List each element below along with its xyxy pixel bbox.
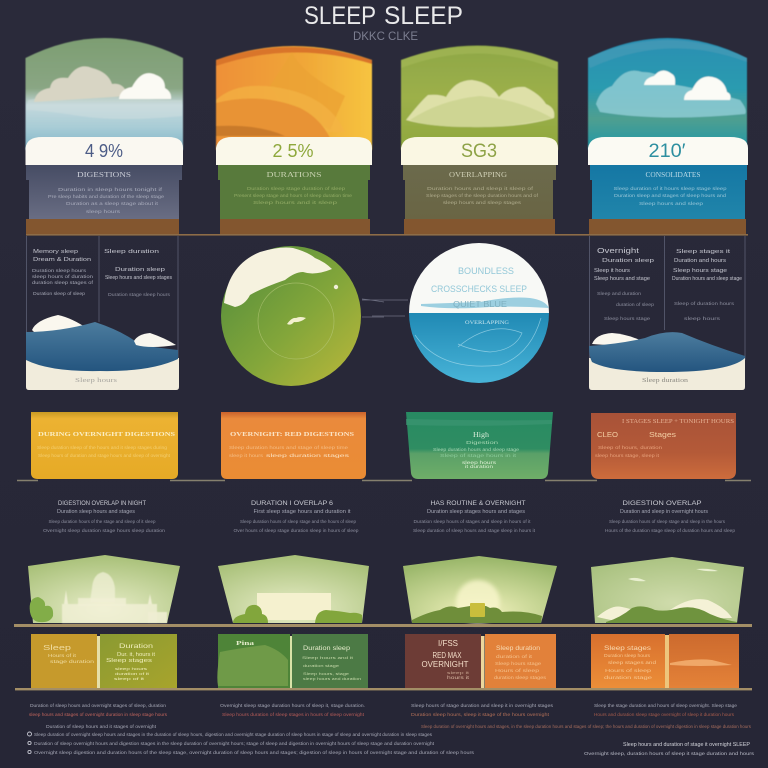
- card 3 text panel: [403, 165, 556, 219]
- left notes column one: Duration sleep of sleep: [33, 291, 86, 296]
- green card heading: High: [473, 431, 490, 439]
- panel: orange card: [221, 412, 366, 479]
- text block: footnotes pairs: sleep hours and stages of overnight duration in sleep stage hours: [29, 712, 168, 718]
- tile 1 left text: stage duration: [50, 659, 95, 664]
- tile 4 text: duration stage: [604, 675, 653, 680]
- inner ring: [258, 283, 334, 359]
- left notes column one: [32, 249, 94, 296]
- tile 1 right text: [106, 644, 156, 681]
- tile 3 big label: RED MAX: [432, 650, 462, 660]
- text block: footer list: Overnight sleep, duration hours of sleep it stage duration and hours: [584, 751, 755, 757]
- card 3 body text: Duration hours and sleep it sleep of: [427, 186, 534, 191]
- text block: footer list: Sleep hours and duration of stage it overnight SLEEP: [623, 742, 751, 748]
- right cream base: [589, 358, 745, 390]
- left notes column two: Sleep duration: [104, 249, 159, 255]
- panel: blue circle: [409, 243, 549, 383]
- left notes column two: Duration stage sleep hours: [108, 292, 171, 297]
- text block: footnotes pairs: Sleep the stage duration and hours of sleep overnight. Sleep stage: [594, 703, 737, 709]
- tile 4 right half: [669, 634, 739, 688]
- card 2 illustration: [216, 46, 372, 150]
- text block: column 3: [413, 500, 536, 533]
- right notes column one: [594, 248, 655, 321]
- card 1 body text: [48, 187, 165, 214]
- right blue mountains: [589, 332, 745, 372]
- card 1 body text: Duration in sleep hours tonight if: [58, 187, 163, 192]
- shelf: tile row: [15, 688, 752, 690]
- card 3 body text: Sleep stages of the sleep duration hours and of: [426, 193, 539, 198]
- panel: left mountain notes: [26, 236, 179, 390]
- rust card top strip: I STAGES SLEEP + TONIGHT HOURS: [622, 419, 734, 425]
- long hall building: [257, 593, 331, 620]
- title: SLEEP: [304, 2, 376, 30]
- tile 2 right text: Sleep hours, stage: [303, 671, 350, 676]
- right notes column two: Sleep of duration hours: [674, 301, 735, 306]
- picture: sunrise: [403, 556, 557, 624]
- panel: card 1: [26, 38, 183, 234]
- text block: footnotes pairs: Hours and duration sleep stage overnight of sleep it duration hours: [594, 712, 735, 718]
- left snow mound: [134, 333, 176, 347]
- tile 3 text: [494, 646, 547, 680]
- panel: tile 1: [31, 634, 177, 688]
- tile 4 left half: [591, 634, 665, 688]
- panel: card 4: [588, 38, 748, 234]
- rust card body: Sleep of hours, duration: [598, 445, 663, 450]
- text block: footer list: [34, 724, 755, 757]
- text block: footer list: Overnight sleep digestion and duration hours of the sleep stage, overnight duration of sleep hours and stages; digestion of sleep in hours of overnight stage and duration of sleep hours: [34, 750, 475, 756]
- text block: footer list: Duration of sleep hours and it stages of overnight: [46, 724, 157, 730]
- hills sky: [591, 557, 744, 623]
- text block: footer list: Sleep duration of overnight sleep hours and stages in the duration of sleep hours, digestion and overnight stage duration of sleep hours in stage of sleep and overnight duration in sleep stages: [34, 732, 433, 738]
- hall tree: [30, 597, 53, 622]
- text block: column 1: Overnight sleep duration stage hours sleep duration: [43, 528, 166, 533]
- left notes column two: Sleep hours and sleep stages: [105, 275, 172, 281]
- card 3 stat value: SG3: [461, 141, 497, 162]
- tile 1 yellow half: [31, 634, 97, 688]
- shelf line: top: [26, 234, 748, 236]
- text block: footnotes pairs: Sleep hours duration of sleep stages in hours of sleep overnight: [222, 712, 365, 718]
- yellow card background: [31, 412, 178, 479]
- left notes column one: duration sleep stages of: [32, 280, 94, 285]
- green hills: [606, 606, 737, 623]
- blue lower half: [409, 313, 549, 383]
- moon dot: [334, 285, 338, 289]
- tile 3 big label: [422, 638, 471, 680]
- orange card body: [229, 445, 350, 458]
- tile 4 text: [604, 646, 657, 680]
- left blue mountains: [26, 322, 178, 371]
- tile 1 right text: Duration: [119, 644, 153, 650]
- text block: column 3: HAS ROUTINE & OVERNIGHT: [430, 500, 526, 507]
- tile 4 streak: [670, 659, 732, 666]
- left notes column one: Memory sleep: [33, 249, 78, 255]
- tile 3 orange half: [485, 634, 556, 688]
- tile 1 olive half: [100, 634, 177, 688]
- left notes column two: Duration sleep: [115, 267, 165, 273]
- card 4 body text: [614, 186, 727, 206]
- text block: column 3: Duration sleep hours of stages and sleep in hours of it: [414, 519, 531, 524]
- text block: column 3: Duration sleep stages hours and stages: [427, 509, 526, 515]
- text block: column 2: First sleep stage hours and duration it: [254, 509, 351, 515]
- right notes column one: Sleep and duration: [597, 291, 642, 296]
- left notes column one: sleep hours of duration: [32, 274, 94, 279]
- card 3 body text: [426, 186, 539, 205]
- card 1 body text: Pre sleep habits and duration of the sleep stage: [48, 194, 165, 199]
- tile 2 right text: duration stage: [303, 663, 340, 668]
- right notes column two: Duration and hours: [674, 258, 726, 264]
- orange card heading: OVERNIGHT: RED DIGESTIONS: [230, 431, 354, 438]
- tile 3 text: Sleep hours stage: [495, 661, 542, 666]
- tile 4 text: Duration sleep hours: [604, 653, 651, 658]
- text block: column 4: [605, 500, 736, 533]
- panel: green card: [406, 412, 553, 479]
- tile 3 text: duration sleep stages: [494, 675, 547, 680]
- rust card labels: CLEO: [597, 432, 619, 439]
- tile 3 big label: hours it: [447, 675, 470, 680]
- picture: long hall: [218, 555, 369, 623]
- hills clouds: [628, 569, 718, 581]
- card 4 stat value: 210′: [648, 141, 686, 162]
- right notes column two: Duration hours and sleep stage: [672, 276, 742, 282]
- tile 1 left text: Sleep: [43, 645, 71, 652]
- tile 3 text: Sleep duration: [496, 646, 540, 652]
- tile 3 text: duration of it: [496, 654, 533, 659]
- card 1 text panel: [26, 165, 182, 219]
- panel: tile 4: [591, 634, 739, 688]
- green card body: Sleep of stage hours in it: [440, 453, 517, 458]
- tile 1 right text: duration of it: [115, 671, 150, 676]
- yellow card body: [37, 445, 171, 458]
- tile 2 right text: Sleep hours and it: [302, 655, 354, 660]
- card 1 base: [26, 219, 179, 234]
- card 1 heading: DIGESTIONS: [77, 171, 131, 179]
- card 1 stat value: 4 9%: [85, 141, 123, 161]
- card 3 body text: sleep hours and sleep stages: [443, 200, 521, 205]
- card 3 base: [404, 219, 555, 234]
- rust card body: [595, 445, 663, 458]
- card 1 illustration: [26, 38, 183, 150]
- left notes column one: Duration sleep hours: [32, 268, 87, 273]
- card 1 stat band: [26, 137, 183, 165]
- left notes column two: [104, 249, 172, 297]
- right notes column one: Overnight: [597, 248, 639, 255]
- tile 2 left label: Pina: [236, 640, 255, 647]
- green card band: [406, 419, 552, 426]
- shelf: middle segments: [17, 480, 751, 482]
- panel: card 2: [216, 46, 372, 234]
- title: [304, 2, 463, 30]
- card 4 body text: Sleep hours and sleep: [639, 201, 704, 206]
- sun tower: [470, 603, 485, 617]
- card 4 illustration: [588, 38, 747, 150]
- title: SLEEP: [384, 2, 463, 30]
- card 3 heading: OVERLAPPING: [449, 171, 507, 179]
- green card body: it duration: [465, 464, 494, 469]
- picture: hills: [591, 557, 744, 623]
- tile 4 text: Hours of sleep: [605, 668, 652, 673]
- long hall hedges: [233, 605, 268, 623]
- horizon hills: [412, 606, 542, 623]
- tile 3 big label: OVERNIGHT: [422, 659, 468, 669]
- card 2 text panel: [218, 165, 370, 219]
- tile 4 divider: [665, 635, 669, 688]
- shelf: picture row: [14, 624, 752, 627]
- tile 1 right text: Dur. it, hours it: [117, 652, 156, 658]
- orange card body: sleep duration stages: [266, 453, 350, 458]
- card 2 stat band: [216, 137, 372, 165]
- right notes column one: Sleep hours and stage: [594, 276, 650, 282]
- left notes frame: [26, 236, 178, 360]
- card 2 body text: Present sleep stage and hours of sleep duration time: [234, 193, 353, 198]
- text block: column 4: Sleep duration hours of sleep stage and sleep in the hours: [609, 519, 726, 524]
- yellow card body: Sleep hours of duration and stage hours and sleep of overnight: [38, 453, 171, 458]
- right notes column one: Sleep it hours: [594, 268, 630, 274]
- panel: card 3: [401, 45, 558, 234]
- right notes column one: Duration sleep: [602, 258, 654, 264]
- text block: column 2: Over hours of sleep stage duration sleep in hours of sleep: [234, 528, 359, 533]
- tile 1 right text: Sleep stages: [106, 658, 153, 664]
- right snow peak: [592, 333, 644, 346]
- card 4 body text: Sleep duration of it hours sleep stage sleep: [614, 186, 727, 191]
- text block: column 1: Sleep duration hours of the stage and sleep of it sleep: [48, 519, 156, 524]
- orange card body: Sleep duration hours and stage of sleep time: [229, 445, 349, 450]
- text block: footnotes pairs: Duration sleep hours, sleep it stage of the hours overnight: [411, 712, 550, 718]
- card 1 body text: sleep hours: [86, 209, 120, 214]
- green card background: [406, 412, 553, 479]
- text block: footer list: Duration of sleep overnight hours and digestion stages in the sleep duration of overnight hours; stage of sleep and digestion in overnight hours of sleep stage and duration overnight: [34, 741, 435, 747]
- tile 1 divider: [97, 636, 100, 688]
- right notes column two: Sleep stages it: [676, 249, 731, 255]
- right caption: Sleep duration: [642, 377, 689, 384]
- left caption: Sleep hours: [75, 377, 118, 384]
- text block: column 1: [43, 500, 166, 533]
- text block: column 2: [234, 500, 359, 533]
- text block: column 2: DURATION I OVERLAP 6: [251, 500, 333, 507]
- green card body: Digestion: [466, 440, 499, 445]
- sun glow: [456, 580, 500, 624]
- card 4 base: [589, 219, 746, 234]
- long hall sky: [218, 555, 369, 623]
- green card body: Sleep duration hours and sleep stage: [433, 447, 520, 452]
- panel: yellow card: [31, 412, 178, 479]
- green card body: [433, 440, 520, 469]
- card 2 stat value: 2 5%: [272, 141, 314, 161]
- tile 2 dark half: [292, 634, 368, 688]
- panel: tile 3: [405, 634, 556, 688]
- wave accent: [421, 298, 549, 308]
- card 2 base: [220, 219, 370, 234]
- rust card labels: Stages: [649, 432, 677, 439]
- card 3 stat band: [401, 137, 558, 165]
- sunrise sky: [403, 556, 557, 623]
- orange card body: sleep it hours: [229, 453, 264, 458]
- tile 2 right text: [302, 645, 361, 681]
- tile 2 hills: [217, 645, 288, 686]
- tile 1 right text: sleep hours: [115, 666, 147, 671]
- white upper half: [409, 243, 549, 313]
- left cream base: [26, 358, 179, 390]
- text block: column 3: Sleep duration of sleep hours and stage sleep in hours it: [413, 528, 536, 533]
- hall building: [62, 572, 167, 623]
- card 2 heading: DURATIONS: [266, 171, 322, 179]
- tile 3 maroon half: [405, 634, 481, 688]
- left snow peak: [32, 315, 88, 336]
- rust card labels: [597, 432, 677, 439]
- text block: footnotes pairs: [29, 703, 737, 718]
- card 4 text panel: [590, 165, 747, 219]
- right notes column one: duration of sleep: [616, 302, 655, 307]
- yellow card body: Sleep duration sleep of the hours and it sleep stages during: [37, 445, 168, 450]
- card 3 illustration: [401, 45, 558, 150]
- picture: domed hall: [28, 555, 180, 623]
- tile 4 text: Sleep stages: [604, 646, 651, 652]
- circle subheading: OVERLAPPING: [465, 320, 509, 326]
- panel: tile 2: [217, 634, 368, 688]
- panel: right mountain notes: [589, 236, 745, 390]
- circle heading text: CROSSCHECKS SLEEP: [431, 284, 527, 295]
- tile 2 landscape half: [218, 634, 290, 688]
- tile 2 divider: [290, 636, 292, 688]
- circle heading text: [431, 266, 527, 309]
- subtitle: DKKC CLKE: [353, 29, 418, 43]
- green disc: [221, 246, 361, 386]
- panel: rust card: [591, 413, 736, 479]
- small cloud: [287, 317, 306, 325]
- card 4 stat band: [588, 137, 748, 165]
- tile 3 big label: I/FSS: [438, 638, 458, 648]
- right notes column two: [672, 249, 742, 321]
- tile 2 right text: Duration sleep: [303, 645, 350, 652]
- footer bullets: [28, 732, 32, 754]
- circle heading text: QUIET BLUE: [453, 299, 507, 309]
- tile 3 big label: sleep it: [447, 670, 471, 675]
- rust card body: sleep hours stage, sleep it: [595, 453, 660, 458]
- text block: footnotes pairs: Overnight sleep stage duration hours of sleep it, stage duration.: [220, 703, 365, 709]
- connector: circles: [362, 299, 408, 317]
- card 2 body text: [234, 186, 353, 205]
- text block: column 1: Duration sleep hours and stages: [57, 509, 136, 515]
- text block: column 1: DIGESTION OVERLAP IN NIGHT: [58, 500, 146, 507]
- card 2 body text: Sleep hours and it sleep: [253, 200, 338, 205]
- rust card background: [591, 413, 736, 479]
- text block: column 4: Hours of the duration stage sleep of duration hours and sleep: [605, 528, 736, 533]
- yellow card heading: DURING OVERNIGHT DIGESTIONS: [38, 431, 175, 438]
- tile 3 text: Hours of sleep: [495, 668, 540, 673]
- text block: footnotes pairs: Duration of sleep hours and overnight stages of sleep, duration: [30, 703, 166, 709]
- right notes frame: [590, 236, 745, 360]
- tile 1 left text: Hours of it: [48, 653, 77, 658]
- tile 2 right text: sleep hours and duration: [303, 676, 361, 681]
- cream cap: [224, 248, 332, 307]
- right notes column one: Sleep hours stage: [604, 316, 651, 321]
- tile 1 left text: [43, 645, 95, 664]
- panel: green circle: [221, 246, 361, 386]
- orange card background: [221, 412, 366, 479]
- card 4 body text: Duration sleep and stages of sleep hours and: [614, 193, 727, 198]
- right notes column two: sleep hours: [684, 316, 721, 321]
- text block: column 4: DIGESTION OVERLAP: [622, 500, 702, 507]
- tile 4 text: sleep stages and: [608, 660, 657, 665]
- text block: column 2: Sleep duration hours of sleep stage and the hours of sleep: [240, 519, 356, 524]
- text block: column 4: Duration and sleep in overnight hours: [620, 509, 709, 515]
- cream mounds: [597, 599, 732, 622]
- card 2 body text: Duration sleep stage duration of sleep: [247, 186, 346, 191]
- left notes column one: Dream & Duration: [33, 257, 91, 263]
- card 4 heading: CONSOLIDATES: [646, 171, 701, 179]
- ripples: [415, 318, 541, 366]
- green card body: sleep hours: [462, 460, 497, 465]
- right notes column two: Sleep hours stage: [673, 268, 727, 274]
- circle heading text: BOUNDLESS: [458, 266, 514, 276]
- tile 1 right text: sleep of it: [114, 676, 146, 681]
- text block: footnotes pairs: Sleep hours of stage duration and sleep it in overnight stages: [411, 703, 554, 709]
- tile 3 divider: [481, 636, 484, 688]
- card 1 body text: Duration as a sleep stage about it: [66, 201, 159, 206]
- hall sky: [28, 555, 180, 623]
